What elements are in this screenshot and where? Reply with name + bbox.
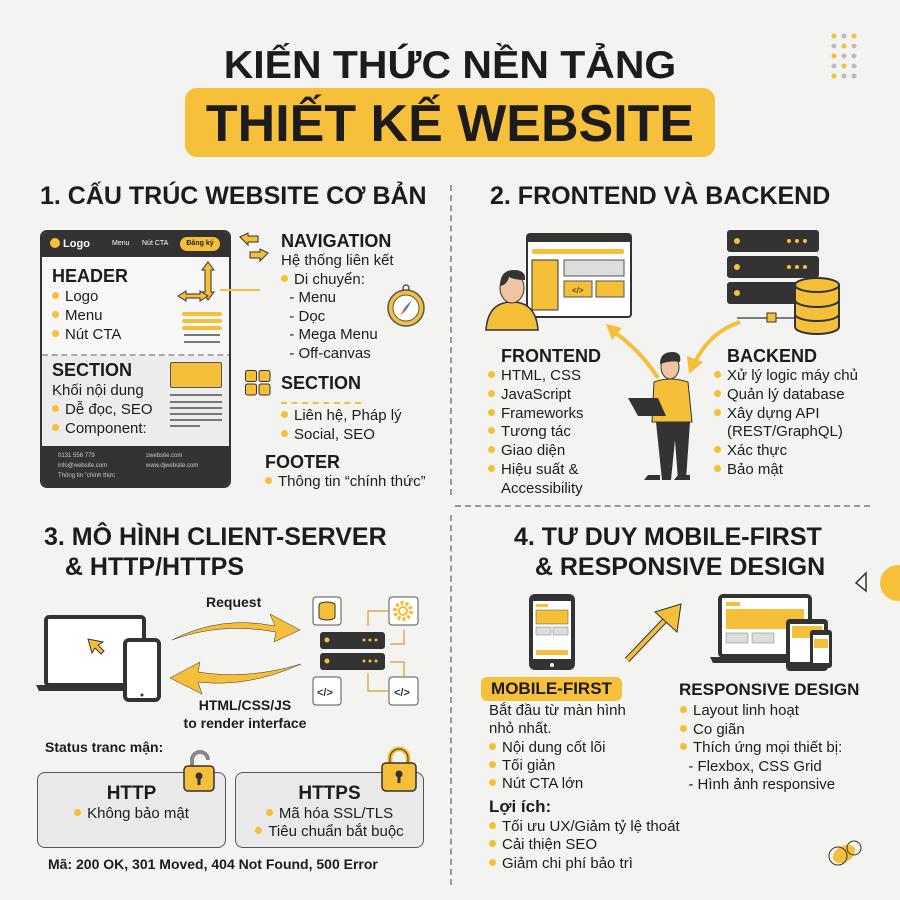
footer: zwebsite.com xyxy=(146,453,182,459)
backend text xyxy=(714,346,858,478)
backend text: Quản lý database xyxy=(727,386,845,403)
section block text: Dễ đọc, SEO xyxy=(65,401,153,418)
icon: frontend person xyxy=(485,270,539,331)
panel: HTTPS xyxy=(235,772,424,848)
panel: HTTPS: Tiêu chuẩn bắt buộc xyxy=(268,823,404,840)
frontend text: HTML, CSS xyxy=(501,367,581,384)
arrow: response xyxy=(170,662,301,694)
section text: Social, SEO xyxy=(294,426,375,442)
frontend text xyxy=(488,346,601,497)
panel: HTTPS: Mã hóa SSL/TLS xyxy=(279,805,393,822)
responsive design text xyxy=(680,702,842,793)
section content placeholder xyxy=(170,362,222,388)
decorative dots top right xyxy=(832,34,856,78)
footer: www.djwebsite.com xyxy=(146,463,198,469)
responsive design text: Co giãn xyxy=(693,720,745,738)
section block text: Component: xyxy=(65,420,147,437)
section text: Liên hệ, Pháp lý xyxy=(294,407,402,424)
mockup nav bar: Logo xyxy=(63,238,90,250)
arrow: mobile to responsive xyxy=(624,603,682,662)
section text xyxy=(281,373,402,442)
section block text: Khối nội dung xyxy=(52,382,144,399)
benefits text: Lợi ích: xyxy=(489,797,551,816)
section 3 heading: & HTTP/HTTPS xyxy=(65,553,244,581)
benefits text: Giảm chi phí bảo trì xyxy=(502,854,633,872)
backend text: Bảo mật xyxy=(727,461,783,478)
panel: HTTP: HTTP xyxy=(107,783,156,804)
arrows in mockup xyxy=(177,261,260,302)
section 2 heading: 2. FRONTEND VÀ BACKEND xyxy=(490,182,830,210)
mockup nav bar xyxy=(42,232,233,257)
footer text: Thông tin “chính thức” xyxy=(278,473,426,490)
header block text: HEADER xyxy=(52,266,128,286)
section 4 heading: & RESPONSIVE DESIGN xyxy=(535,553,825,581)
footer: 0131 556 779 xyxy=(58,453,95,459)
mobile-first text: Nút CTA lớn xyxy=(502,775,583,792)
section 4 heading xyxy=(514,523,825,581)
responsive design text: - Hình ảnh responsive xyxy=(688,776,835,793)
navigation text: Di chuyển: xyxy=(294,270,365,288)
backend text: Xây dựng API xyxy=(727,405,820,422)
mobile-first text: Nội dung cốt lõi xyxy=(502,739,605,756)
mockup nav bar: Nút CTA xyxy=(142,240,168,247)
footer: Thông tin "chính thức xyxy=(58,473,115,479)
responsive design text: Layout linh hoạt xyxy=(693,702,799,719)
arrow: request xyxy=(172,614,300,642)
frontend text: Hiệu suất & xyxy=(501,461,579,478)
status codes: Mã: 200 OK, 301 Moved, 404 Not Found, 500 Error xyxy=(48,856,378,872)
arrow: dev to frontend xyxy=(606,324,660,380)
header block text: Menu xyxy=(65,307,103,324)
panel: HTTPS: HTTPS xyxy=(298,783,361,804)
panel: HTTP xyxy=(37,772,226,848)
badge: mobile-first xyxy=(481,677,622,701)
backend text: Xác thực xyxy=(727,442,787,459)
icon: server stack xyxy=(727,230,840,335)
icon: browser window frontend: </> xyxy=(572,286,584,295)
responsive design text: - Flexbox, CSS Grid xyxy=(688,758,822,774)
footer xyxy=(42,446,233,490)
benefits text xyxy=(489,797,680,872)
icon: browser window frontend xyxy=(526,233,632,318)
frontend text: Giao diện xyxy=(501,442,565,459)
frontend text: Tương tác xyxy=(501,423,571,440)
backend text: BACKEND xyxy=(727,346,817,366)
section block text: SECTION xyxy=(52,360,132,380)
response label: to render interface xyxy=(184,715,306,731)
icon: server cluster: </> xyxy=(394,687,410,699)
request label: Request xyxy=(206,594,261,610)
mockup nav bar: Đăng ký xyxy=(186,240,214,247)
mobile-first text: Tối giản xyxy=(502,757,555,774)
icon: server cluster xyxy=(312,596,418,706)
response label xyxy=(184,697,306,731)
arrow: backend to dev xyxy=(687,320,741,374)
section block text xyxy=(52,360,153,437)
frontend text: FRONTEND xyxy=(501,346,601,366)
section 3 heading xyxy=(44,522,387,581)
section 4 heading: 4. TƯ DUY MOBILE-FIRST xyxy=(514,523,822,551)
icon: responsive devices xyxy=(710,594,832,671)
status label: Status tranc mận: xyxy=(45,739,163,755)
panel: HTTP: Không bảo mật xyxy=(87,805,189,822)
title line 1: KIẾN THỨC NỀN TẢNG xyxy=(224,44,676,87)
frontend text: Accessibility xyxy=(501,480,583,497)
icon: compass xyxy=(387,284,425,327)
navigation text: NAVIGATION xyxy=(281,231,391,251)
icon: closed lock xyxy=(381,746,417,792)
icon: mobile phone xyxy=(529,594,575,670)
menu lines xyxy=(182,312,222,343)
section text: SECTION xyxy=(281,373,361,393)
icon: laptop and phone xyxy=(36,615,161,702)
icon: server cluster: </> xyxy=(317,687,333,699)
footer: info@website.com xyxy=(58,463,107,469)
frontend text: JavaScript xyxy=(501,386,571,403)
navigation text: - Mega Menu xyxy=(289,326,378,343)
badge: mobile-first: MOBILE-FIRST xyxy=(491,679,612,698)
mockup nav bar: Menu xyxy=(112,240,130,247)
title banner: THIẾT KẾ WEBSITE xyxy=(206,95,694,153)
navigation text: - Menu xyxy=(289,289,336,306)
navigation text: - Off-canvas xyxy=(289,344,371,362)
mobile-first text xyxy=(489,702,626,792)
mobile-first text: Bắt đầu từ màn hình xyxy=(489,702,626,719)
panel: website mockup xyxy=(40,230,231,488)
decorative dividers xyxy=(450,185,452,495)
frontend text: Frameworks xyxy=(501,405,584,422)
backend text: (REST/GraphQL) xyxy=(727,423,843,440)
icon: section grid xyxy=(245,370,270,396)
mobile-first text: nhỏ nhất. xyxy=(489,720,552,737)
footer text xyxy=(265,452,426,490)
header block text xyxy=(52,266,128,343)
header block text: Logo xyxy=(65,288,98,305)
footer text: FOOTER xyxy=(265,452,340,472)
icon: developer with laptop xyxy=(628,352,693,480)
navigation text xyxy=(281,231,394,362)
responsive design text: Thích ứng mọi thiết bị: xyxy=(693,739,842,756)
header block text: Nút CTA xyxy=(65,326,121,343)
responsive design heading: RESPONSIVE DESIGN xyxy=(679,680,859,699)
backend text: Xử lý logic máy chủ xyxy=(727,367,858,384)
icon: open lock xyxy=(183,750,215,792)
section 3 heading: 3. MÔ HÌNH CLIENT-SERVER xyxy=(44,523,387,551)
navigation text: Hệ thống liên kết xyxy=(281,252,394,269)
benefits text: Cải thiện SEO xyxy=(502,836,597,853)
benefits text: Tối ưu UX/Giảm tỷ lệ thoát xyxy=(502,818,680,834)
response label: HTML/CSS/JS xyxy=(199,697,291,713)
navigation text: - Dọc xyxy=(289,308,325,324)
decorative corner shapes xyxy=(855,565,900,601)
section 1 heading: 1. CẤU TRÚC WEBSITE CƠ BẢN xyxy=(40,182,427,210)
